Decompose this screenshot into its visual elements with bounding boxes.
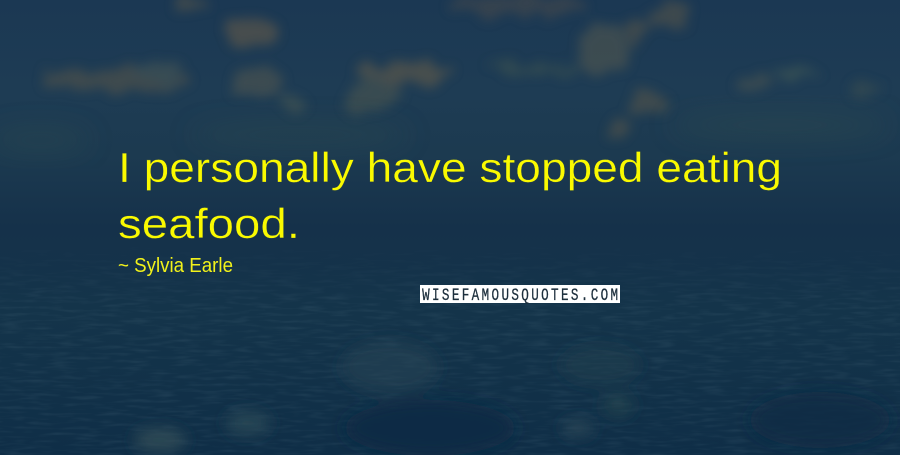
quote text: seafood.: [118, 200, 300, 247]
sea ripples: [2, 294, 894, 455]
clouds: [43, 0, 881, 137]
author attribution: ~ Sylvia Earle: [118, 255, 233, 277]
quote text: I personally have stopped eating: [118, 144, 782, 191]
watermark logo: WISEFAMOUSQUOTES.COM: [422, 285, 618, 306]
low haze: [0, 113, 890, 150]
quote text: [118, 144, 782, 247]
sea reflections: [134, 341, 890, 455]
